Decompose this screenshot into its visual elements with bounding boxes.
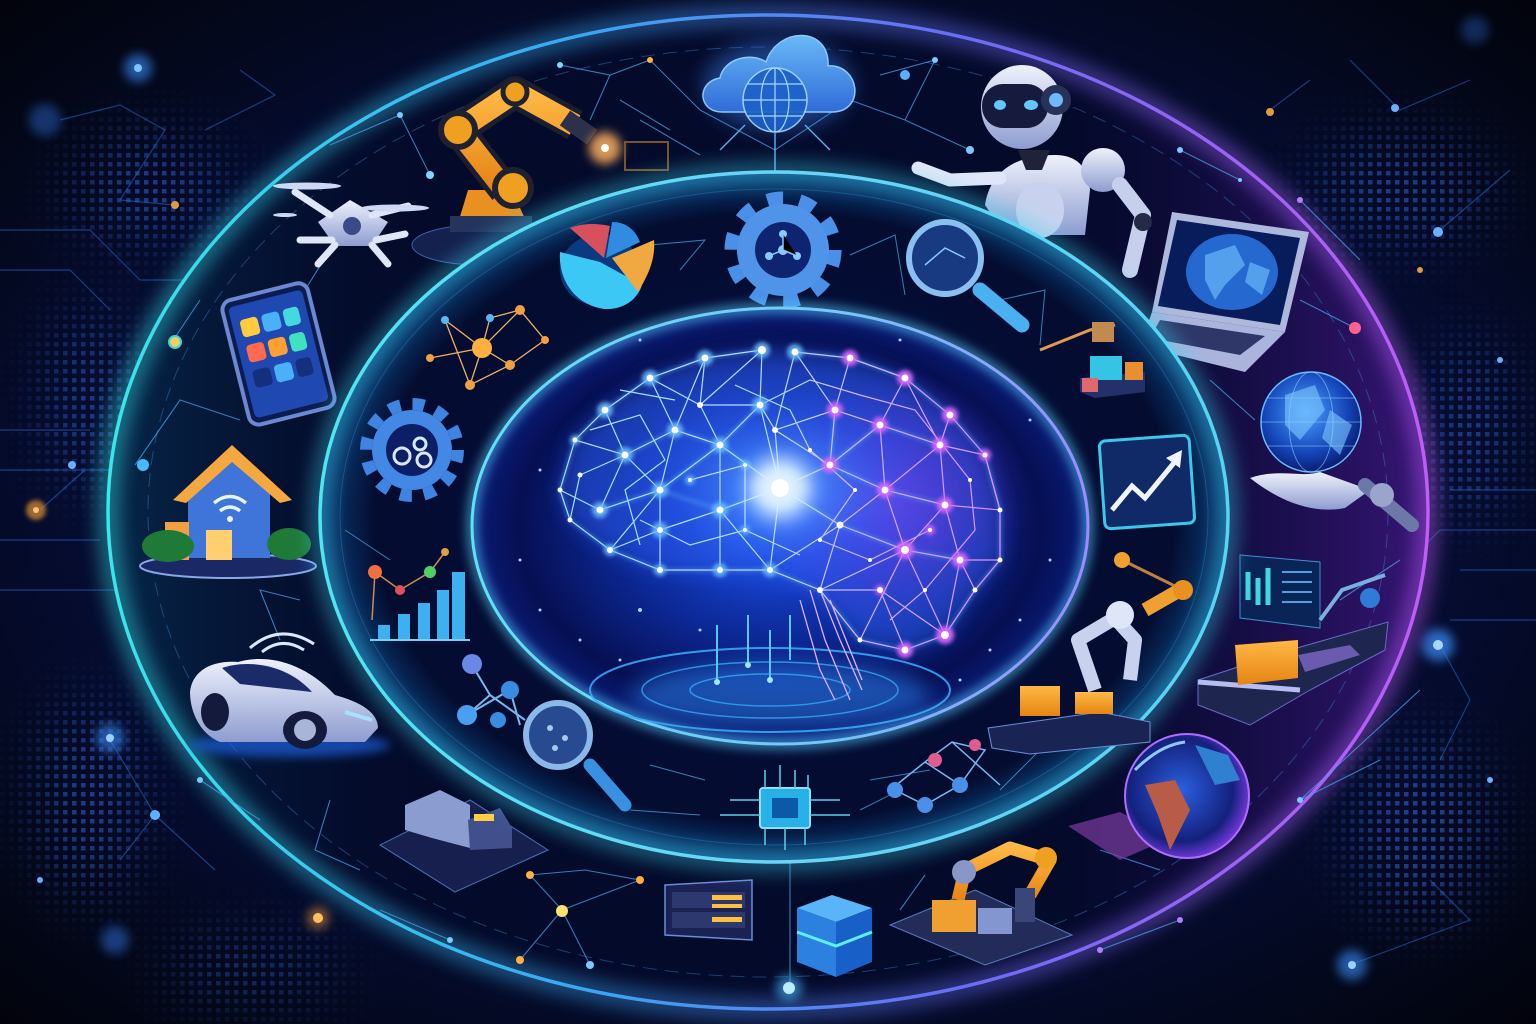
icon: small cube cluster xyxy=(1040,322,1145,398)
icon: parcel conveyor xyxy=(1198,622,1388,725)
icon: globe on robot hand xyxy=(1250,372,1412,525)
brain node cores xyxy=(558,346,1002,654)
icon: cloud with globe xyxy=(703,35,855,172)
icon: processor chip xyxy=(720,765,850,850)
icon: industrial machine block xyxy=(380,790,548,892)
icon: white robot on conveyor xyxy=(988,552,1193,754)
icon: growth chart panel xyxy=(1099,435,1195,529)
network lines in middle band xyxy=(345,235,1045,815)
icon: gear with cells xyxy=(366,404,458,496)
central core ellipse xyxy=(472,308,1088,744)
icon: orange robot arm xyxy=(412,80,668,265)
icon: humanoid robot xyxy=(918,65,1152,270)
icon: blue gear with network xyxy=(731,198,835,302)
network nodes in outer band xyxy=(137,57,1361,1001)
icon: drone xyxy=(273,182,429,264)
brain stem lines xyxy=(800,590,862,700)
icon: magnifying glass lower xyxy=(526,703,625,805)
icon: node network xyxy=(426,305,549,390)
brain connections xyxy=(560,350,1000,650)
icon: molecule network right xyxy=(887,739,1000,813)
middle ring xyxy=(320,172,1228,862)
brain network xyxy=(558,342,1030,700)
holographic platform xyxy=(590,615,950,732)
icon: server rack xyxy=(665,880,752,940)
brain node halos purple xyxy=(822,350,991,658)
icon: smart home xyxy=(140,445,316,578)
icon: robot arm on platform xyxy=(890,847,1072,965)
icon: connected car xyxy=(190,634,390,757)
icon: earth globe xyxy=(1068,734,1249,860)
icon: glowing data cube xyxy=(797,895,872,977)
icon: pie chart xyxy=(560,222,654,309)
icon: magnifying glass top xyxy=(909,222,1022,325)
icon: laptop with globe xyxy=(1140,212,1309,372)
icon: tablet xyxy=(220,281,337,427)
icon: molecule network left xyxy=(457,654,525,728)
brain node halos blue xyxy=(570,342,803,577)
brain connections glow xyxy=(560,350,1000,650)
icon: bar chart with trend xyxy=(368,548,470,640)
network lines in outer band xyxy=(135,60,1420,990)
icon: data dashboard panel xyxy=(1240,555,1385,628)
